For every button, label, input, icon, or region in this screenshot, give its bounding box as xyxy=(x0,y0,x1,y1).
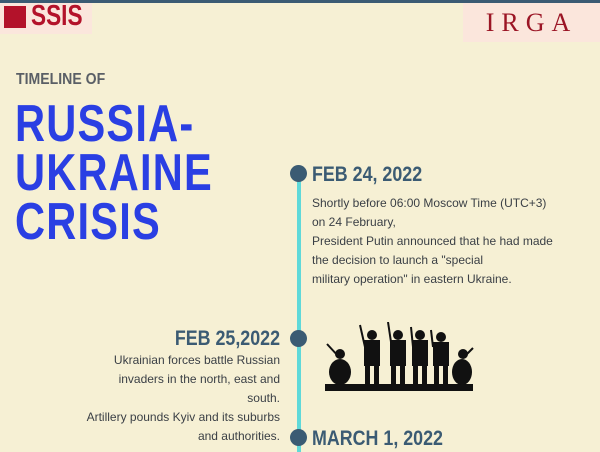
event: Feb 24: the decision to launch a "special xyxy=(312,253,483,267)
title: UKRAINE xyxy=(15,144,213,202)
event: Feb 24: military operation" in eastern Ukraine. xyxy=(312,272,512,286)
event: Feb 24 xyxy=(312,163,553,286)
event: Feb 25: invaders in the north, east and xyxy=(119,372,280,386)
event: Feb 25: and authorities. xyxy=(198,429,280,443)
timeline line xyxy=(297,172,301,452)
dot 3 xyxy=(290,429,307,446)
event: Feb 24: on 24 February, xyxy=(312,215,396,229)
logo: IRGA xyxy=(463,3,600,42)
dot 1 xyxy=(290,165,307,182)
title: RUSSIA- xyxy=(15,95,194,153)
logo: IRGA: IRGA xyxy=(486,8,577,37)
event: Feb 24: FEB 24, 2022 xyxy=(312,163,422,186)
logo: SSIS xyxy=(0,3,92,34)
event: Feb 25 xyxy=(86,327,280,443)
subtitle: TIMELINE OF xyxy=(16,71,105,88)
event: Feb 24: Shortly before 06:00 Moscow Time (UTC+3) xyxy=(312,196,546,210)
title xyxy=(15,95,213,251)
icon: soldiers silhouette xyxy=(325,322,474,391)
event: March 1: MARCH 1, 2022 xyxy=(312,427,443,450)
event: Feb 25: south. xyxy=(247,391,280,405)
title: CRISIS xyxy=(15,193,161,251)
event: Feb 24: President Putin announced that he had made xyxy=(312,234,553,248)
event: Feb 25: Ukrainian forces battle Russian xyxy=(114,353,280,367)
event: Feb 25: FEB 25,2022 xyxy=(175,327,280,350)
event: Feb 25: Artillery pounds Kyiv and its suburbs xyxy=(87,410,280,424)
dot 2 xyxy=(290,330,307,347)
logo: SSIS: SSIS xyxy=(31,0,83,32)
